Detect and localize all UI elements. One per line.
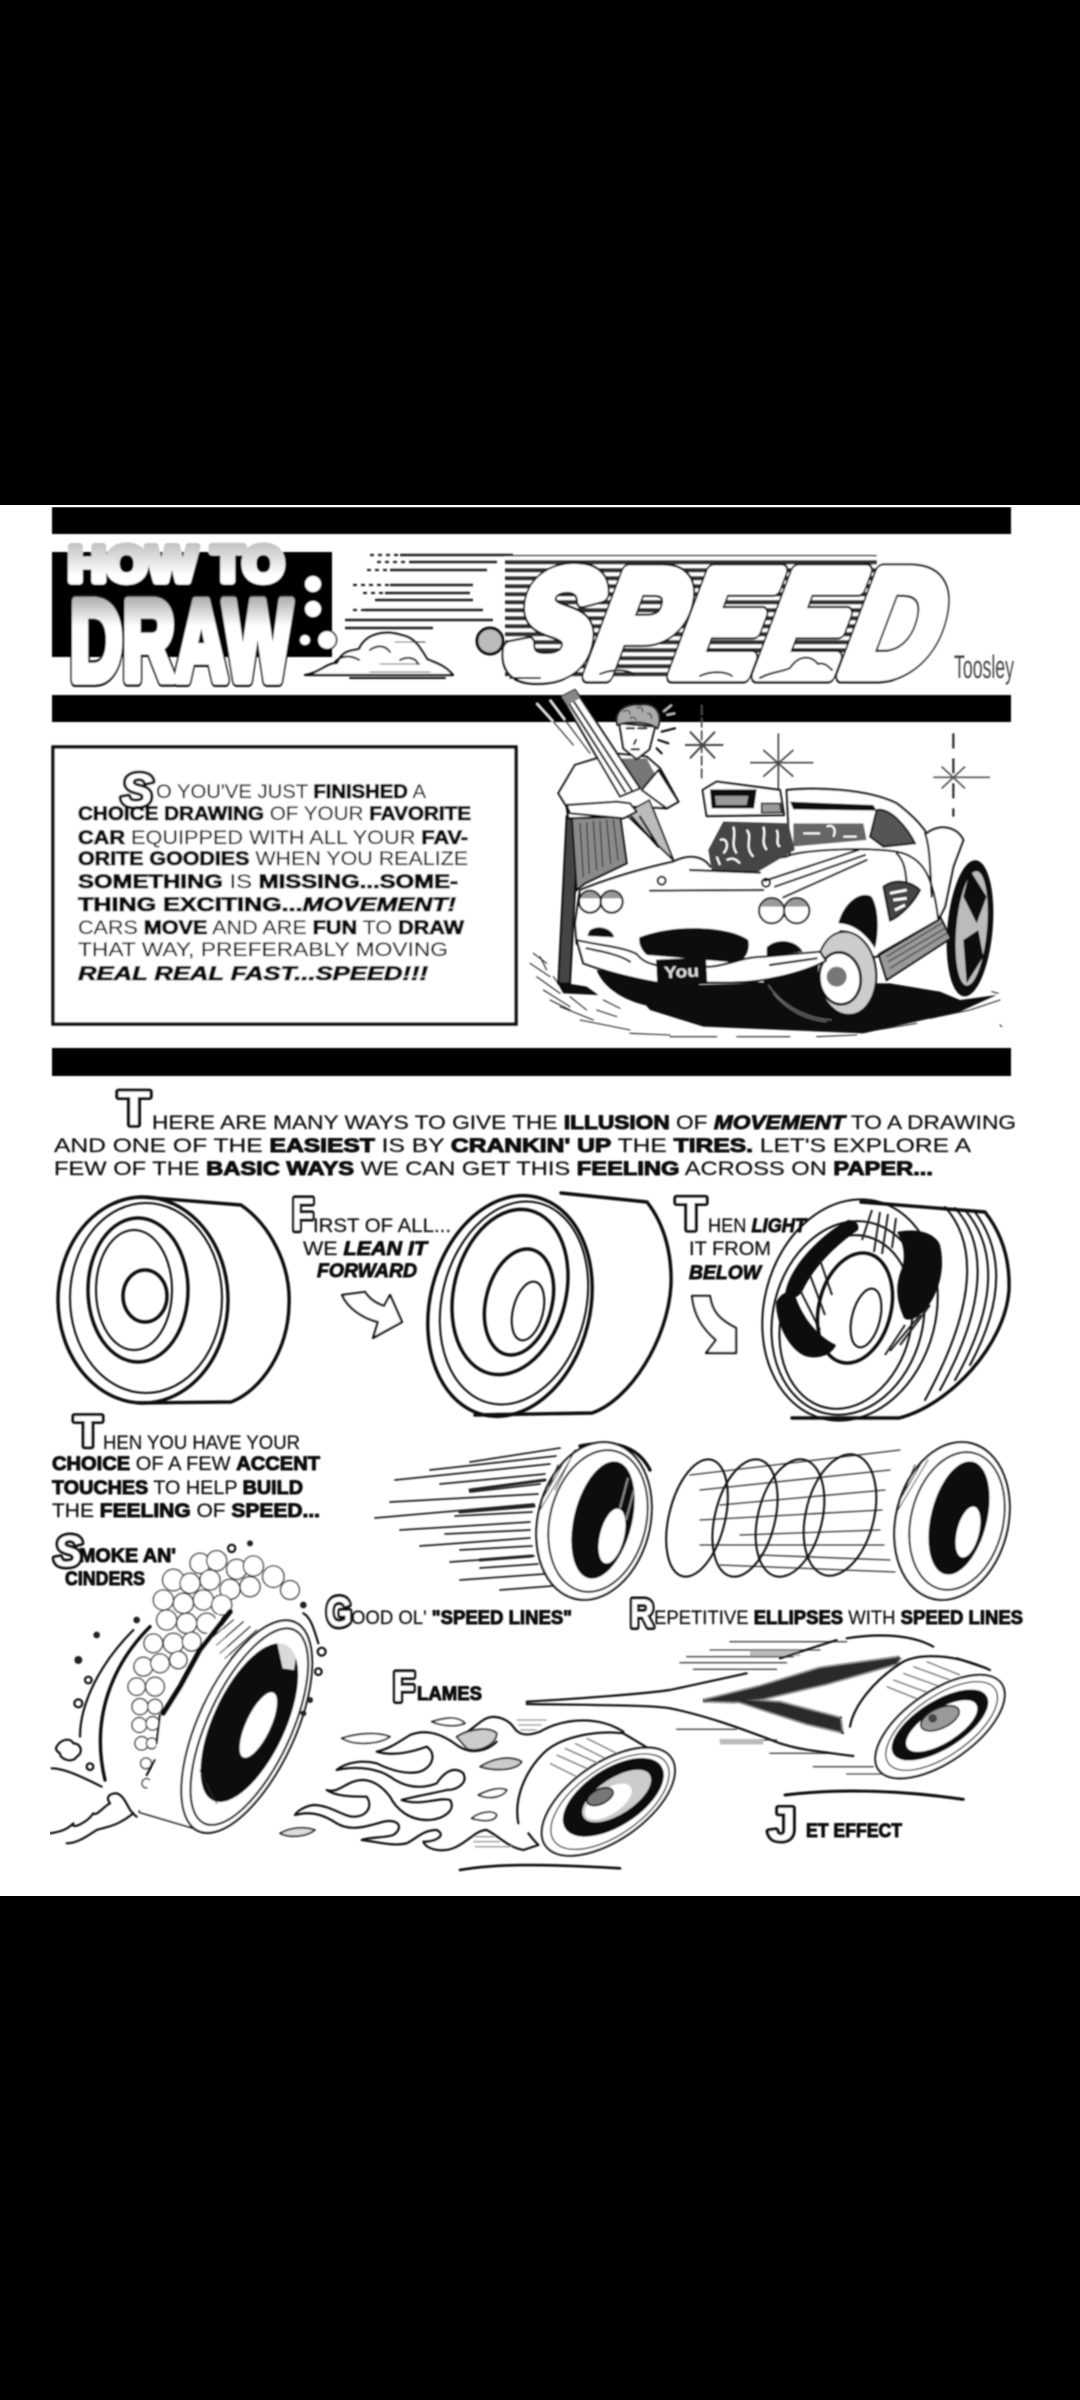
bumper [577,940,826,983]
caption: first of all: WE LEAN IT [303,1238,429,1260]
person [537,690,678,995]
caption: jet effect [768,1798,902,1850]
title: draw outline: DRAW [70,578,292,705]
face [619,723,655,759]
striped trail between letters [505,555,877,680]
black top band [0,0,1080,505]
box copy: THAT WAY, PREFERABLY MOVING [78,939,448,961]
ground shadow [460,1865,620,1870]
front left tyre [597,970,700,1007]
second bar [52,695,1011,722]
caption: repetitive ellipses: EPETITIVE ELLIPSES WITH SPEED LINES [654,1607,1023,1629]
ground shadow [785,1791,963,1799]
door flames [883,882,920,921]
lower leg behind car [558,817,578,983]
box copy: THING EXCITING... MOVEMENT! [78,894,457,916]
box copy: CHOICE DRAWING OF YOUR FAVORITE [78,803,471,825]
caption: then light: HEN LIGHT [708,1215,808,1237]
caption: accent touches: T [74,1407,102,1456]
illustration: cartoonist with pencil and hot rod [530,690,1002,1037]
motion lines [537,700,565,722]
artist signature: Toosley [954,649,1014,685]
speed lines behind title [345,555,513,628]
speed ball [477,628,503,654]
caption: first of all [292,1188,451,1282]
caption: speed lines [326,1588,572,1635]
flame islands [280,1718,522,1836]
caption: accent touches: HEN YOU HAVE YOUR [103,1432,300,1454]
dust clouds under title [305,633,453,675]
caption: then light: BELOW [689,1262,763,1284]
upper edge [527,1635,933,1756]
ground shadow and scratches [530,953,1002,1037]
jet cone shading: upper band [703,1657,900,1702]
right headlights [759,898,809,923]
black bottom band [0,1896,1080,2400]
paragraph copy: HERE ARE MANY WAYS TO GIVE THE ILLUSION OF MOVEMENT TO A DRAWING [152,1112,1016,1134]
tire 2: leaning forward [405,1178,671,1434]
tire: speed lines [375,1430,668,1612]
box copy: O YOU'VE JUST FINISHED A [156,781,426,803]
caption: flames: LAMES [417,1683,482,1705]
title: draw: DRAW [70,578,292,705]
hood lines [650,850,867,897]
engine [708,822,795,873]
intro text box [53,747,516,1024]
caption: then light: IT FROM [689,1238,771,1260]
box frame [53,747,516,1024]
title: speed: SPEED [495,541,961,708]
licence plate: You [664,961,699,982]
drop cap T: T [118,1083,150,1136]
sparkles [685,705,990,817]
tire 3: lit from below [739,1181,1009,1439]
legs [572,815,627,890]
tire: smoke and cinders [50,1540,339,1851]
caption: jet effect: J [768,1798,796,1850]
tire: flames [280,1717,693,1877]
drop cap S: S [121,764,153,816]
caption: smoke and cinders: S [54,1527,82,1576]
caption: accent touches: TOUCHES TO HELP BUILD [52,1477,303,1499]
title: how to: HOW TO [68,536,284,592]
licence plate [656,957,707,986]
caption: flames [393,1663,482,1710]
tire: repetitive ellipses [655,1430,1026,1612]
blower scoop [703,782,784,816]
smoke puffs [128,1551,299,1788]
tire [850,1656,990,1727]
caption: flames: F [393,1663,415,1710]
title: speed outline: SPEED [495,541,961,708]
white behind right of D [877,553,952,681]
rear tyre [941,858,999,998]
arrow: to tire 2 [342,1292,402,1338]
caption: smoke and cinders: CINDERS [65,1568,145,1590]
flame outline [458,1717,623,1737]
tire body [140,1613,247,1828]
wheel arch [838,895,878,948]
caption: repetitive ellipses [630,1592,1023,1636]
box copy: ORITE GOODIES WHEN YOU REALIZE [78,848,468,870]
cinders [74,1540,313,1716]
interior [793,823,867,847]
caption: first of all: IRST OF ALL... [313,1215,451,1237]
top bar [52,507,1011,534]
caption: accent touches [52,1407,320,1522]
third bar [52,1048,1011,1076]
title banner [52,536,1014,708]
caption: jet effect: ET EFFECT [806,1820,902,1842]
tire [517,1732,657,1823]
caption: accent touches: CHOICE OF A FEW ACCENT [52,1453,320,1475]
box copy: CARS MOVE AND ARE FUN TO DRAW [78,917,465,939]
white page [0,505,1080,1896]
caption: then light: T [676,1188,706,1240]
front right tyre [763,929,880,1027]
caption: speed lines: G [326,1588,352,1635]
surprise marks [657,728,675,753]
hand and arm [567,802,637,818]
motion lines [677,1642,887,1774]
comic page artwork [50,507,1026,1877]
caption: then light [676,1188,808,1284]
fender vents [767,941,803,957]
tire: jet effect [527,1635,1022,1799]
box copy: SOMETHING IS MISSING...SOME- [78,871,458,893]
torso [558,753,678,818]
intro paragraph: FEW OF THE BASIC WAYS WE CAN GET THIS FEELING ACROSS ON PAPER... [54,1158,933,1180]
caption: speed lines: OOD OL' "SPEED LINES" [351,1607,572,1629]
windshield band [790,802,877,811]
shaded crescents [897,1231,942,1320]
side window [870,810,915,847]
caption: accent touches: THE FEELING OF SPEED... [52,1500,320,1522]
box copy: CAR EQUIPPED WITH ALL YOUR FAV- [78,827,468,849]
caption: smoke and cinders: MOKE AN' [79,1545,176,1567]
caption: first of all: F [292,1188,314,1240]
arrow: to tire 3 [692,1296,736,1353]
rear quarter and roof [787,789,963,957]
jet cone shading: lower band [733,1699,842,1732]
pencil point [625,800,673,860]
intro paragraph [54,1083,1016,1180]
box copy: REAL REAL FAST...SPEED!!! [78,963,429,985]
box copy [78,781,471,985]
side pipe [878,917,951,980]
pencil [562,690,640,797]
caption: first of all: FORWARD [317,1260,417,1282]
left headlights [579,891,623,913]
how to black box [52,552,332,657]
tire 1: flat front view [58,1197,289,1403]
caption: smoke and cinders [54,1527,176,1590]
hair [617,705,660,728]
caption: repetitive ellipses: R [630,1592,654,1636]
boot [557,982,598,995]
title colon dots [300,576,336,650]
car body [575,849,938,983]
intro paragraph: AND ONE OF THE EASIEST IS BY CRANKIN' UP THE TIRES. LET'S EXPLORE A [54,1135,971,1157]
grille [639,928,749,963]
